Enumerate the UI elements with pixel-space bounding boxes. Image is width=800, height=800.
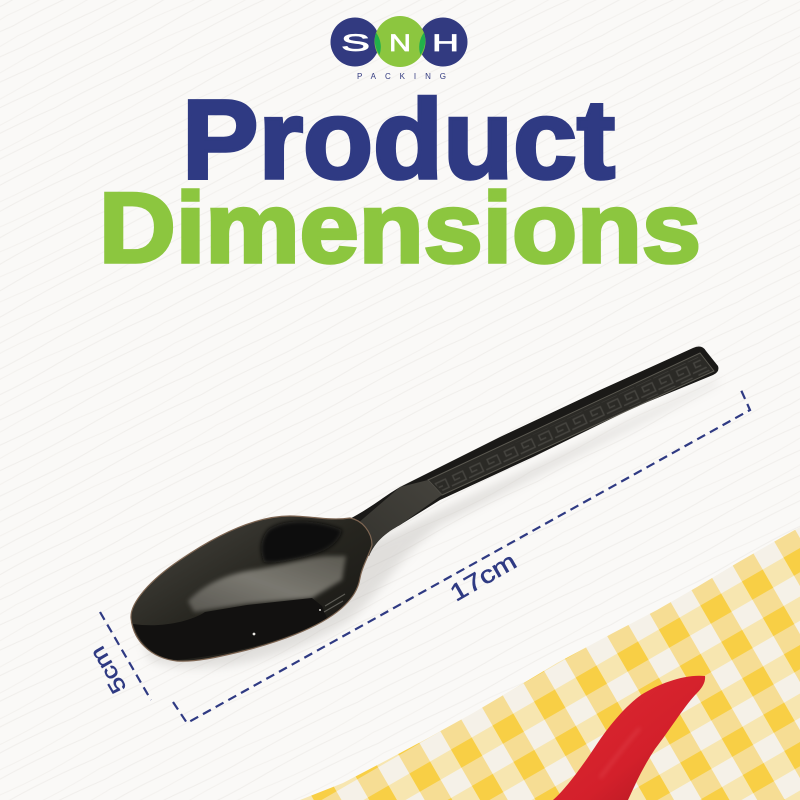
title: Product: Product xyxy=(182,77,615,202)
logo: SNH Packing: N xyxy=(389,30,411,57)
title: Dimensions: Dimensions xyxy=(99,172,701,283)
spoon bowl xyxy=(131,516,372,661)
red chili xyxy=(553,676,705,800)
logo letters: S xyxy=(341,30,370,57)
logo: SNH Packing xyxy=(330,16,468,81)
checkered cloth xyxy=(300,527,800,800)
logo: SNH Packing: H xyxy=(432,30,459,57)
logo circles xyxy=(330,16,468,67)
dark reflection xyxy=(261,521,342,563)
label: 5cm: 5cm xyxy=(85,642,131,698)
spoon handle xyxy=(347,347,718,556)
glints xyxy=(253,633,255,635)
greek key panel xyxy=(428,353,714,495)
label: 17cm: 17cm xyxy=(446,548,521,607)
highlight band xyxy=(188,556,346,612)
spoon shadow xyxy=(140,378,720,668)
lower dark area xyxy=(133,598,327,660)
black plastic spoon xyxy=(131,347,718,661)
dimension line: 5cm xyxy=(85,612,151,700)
logo tagline: PACKING xyxy=(357,72,446,81)
